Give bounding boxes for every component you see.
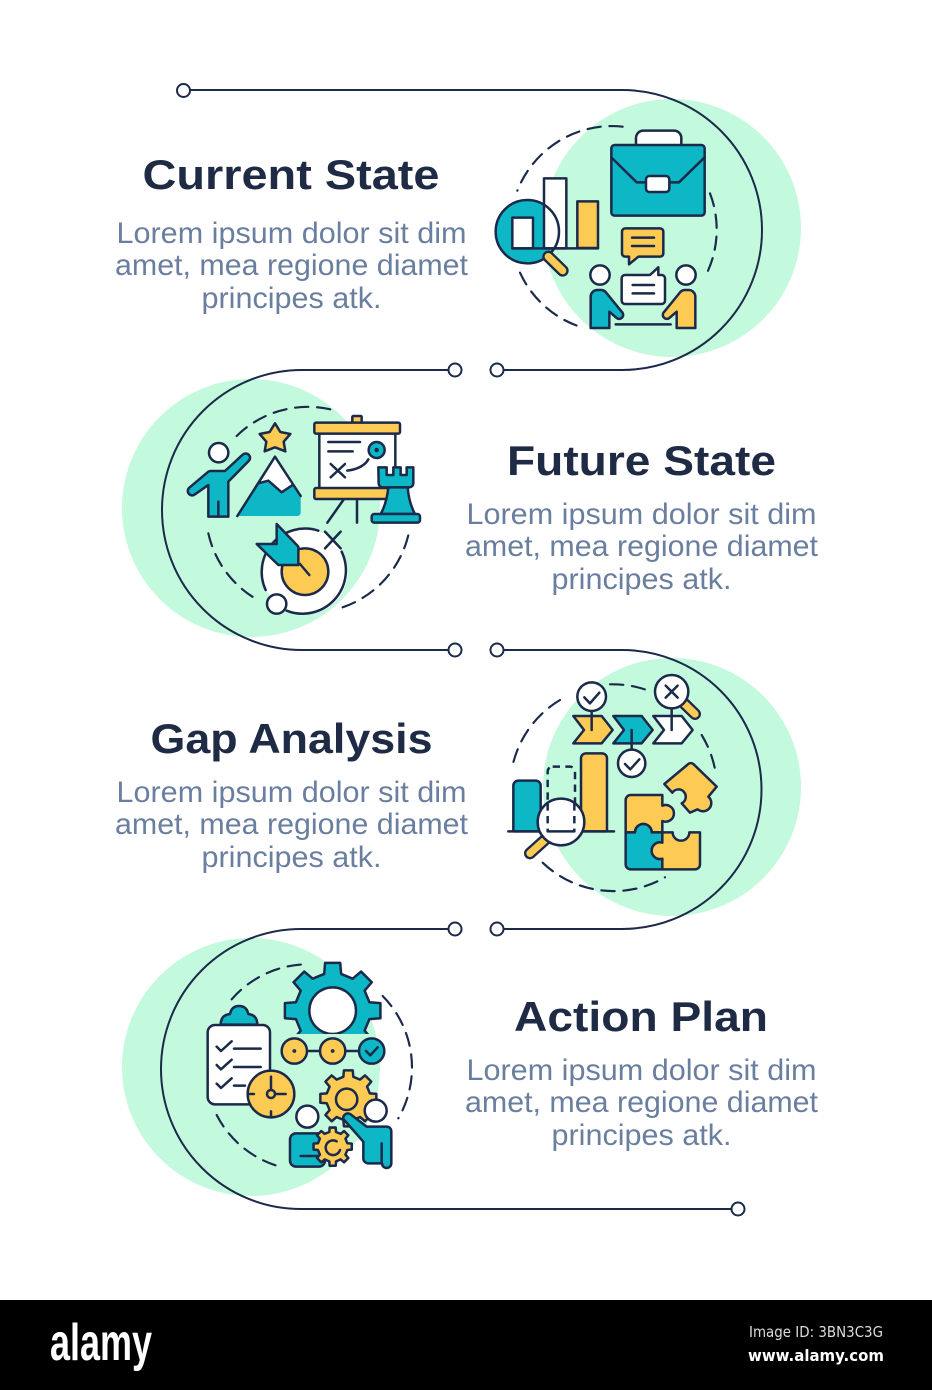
heading: Current State: [142, 151, 440, 198]
panel: future state: [122, 364, 819, 656]
body text: [465, 1054, 819, 1152]
body text: amet, mea regione diamet: [465, 530, 819, 563]
website: www.alamy.com: [748, 1346, 884, 1365]
mint circle: [122, 379, 380, 637]
end node: [732, 1202, 744, 1216]
icon: strategy: [188, 407, 420, 614]
body text: [115, 776, 469, 874]
body text: Lorem ipsum dolor sit dim: [116, 217, 466, 250]
start node: [448, 922, 462, 936]
connector arc: [161, 929, 732, 1209]
body text: principes atk.: [552, 1119, 732, 1152]
start node: [490, 644, 504, 656]
icon: business analysis: [496, 126, 717, 328]
body text: amet, mea regione diamet: [115, 808, 469, 841]
start node: [177, 84, 190, 97]
icon: action planning: [208, 963, 412, 1168]
heading: Action Plan: [514, 993, 768, 1040]
body text: Lorem ipsum dolor sit dim: [466, 498, 816, 531]
body text: amet, mea regione diamet: [465, 1086, 819, 1119]
heading: Gap Analysis: [150, 715, 432, 762]
body text: principes atk.: [202, 282, 382, 315]
connector arc: [504, 650, 762, 929]
end node: [448, 644, 462, 656]
mint circle: [543, 658, 801, 916]
logo text: alamy: [50, 1314, 152, 1372]
body text: amet, mea regione diamet: [115, 249, 469, 282]
end node: [490, 364, 504, 376]
watermark footer band: [0, 1300, 932, 1390]
image id: Image ID: 3BN3C3G: [749, 1323, 883, 1341]
body text: principes atk.: [202, 841, 382, 874]
body text: [115, 217, 469, 315]
icon: gap analysis: [508, 675, 717, 891]
body text: Lorem ipsum dolor sit dim: [116, 776, 466, 809]
connector arc: [190, 90, 762, 370]
body text: principes atk.: [552, 563, 732, 596]
start node: [448, 364, 462, 376]
panel: current state: [115, 84, 801, 376]
body text: [465, 498, 819, 596]
mint circle: [122, 938, 380, 1196]
panel: gap analysis: [115, 644, 801, 936]
connector arc: [162, 370, 449, 650]
end node: [490, 922, 504, 936]
mint circle: [543, 99, 801, 357]
panel: action plan: [122, 922, 819, 1216]
body text: Lorem ipsum dolor sit dim: [466, 1054, 816, 1087]
heading: Future State: [507, 437, 776, 484]
